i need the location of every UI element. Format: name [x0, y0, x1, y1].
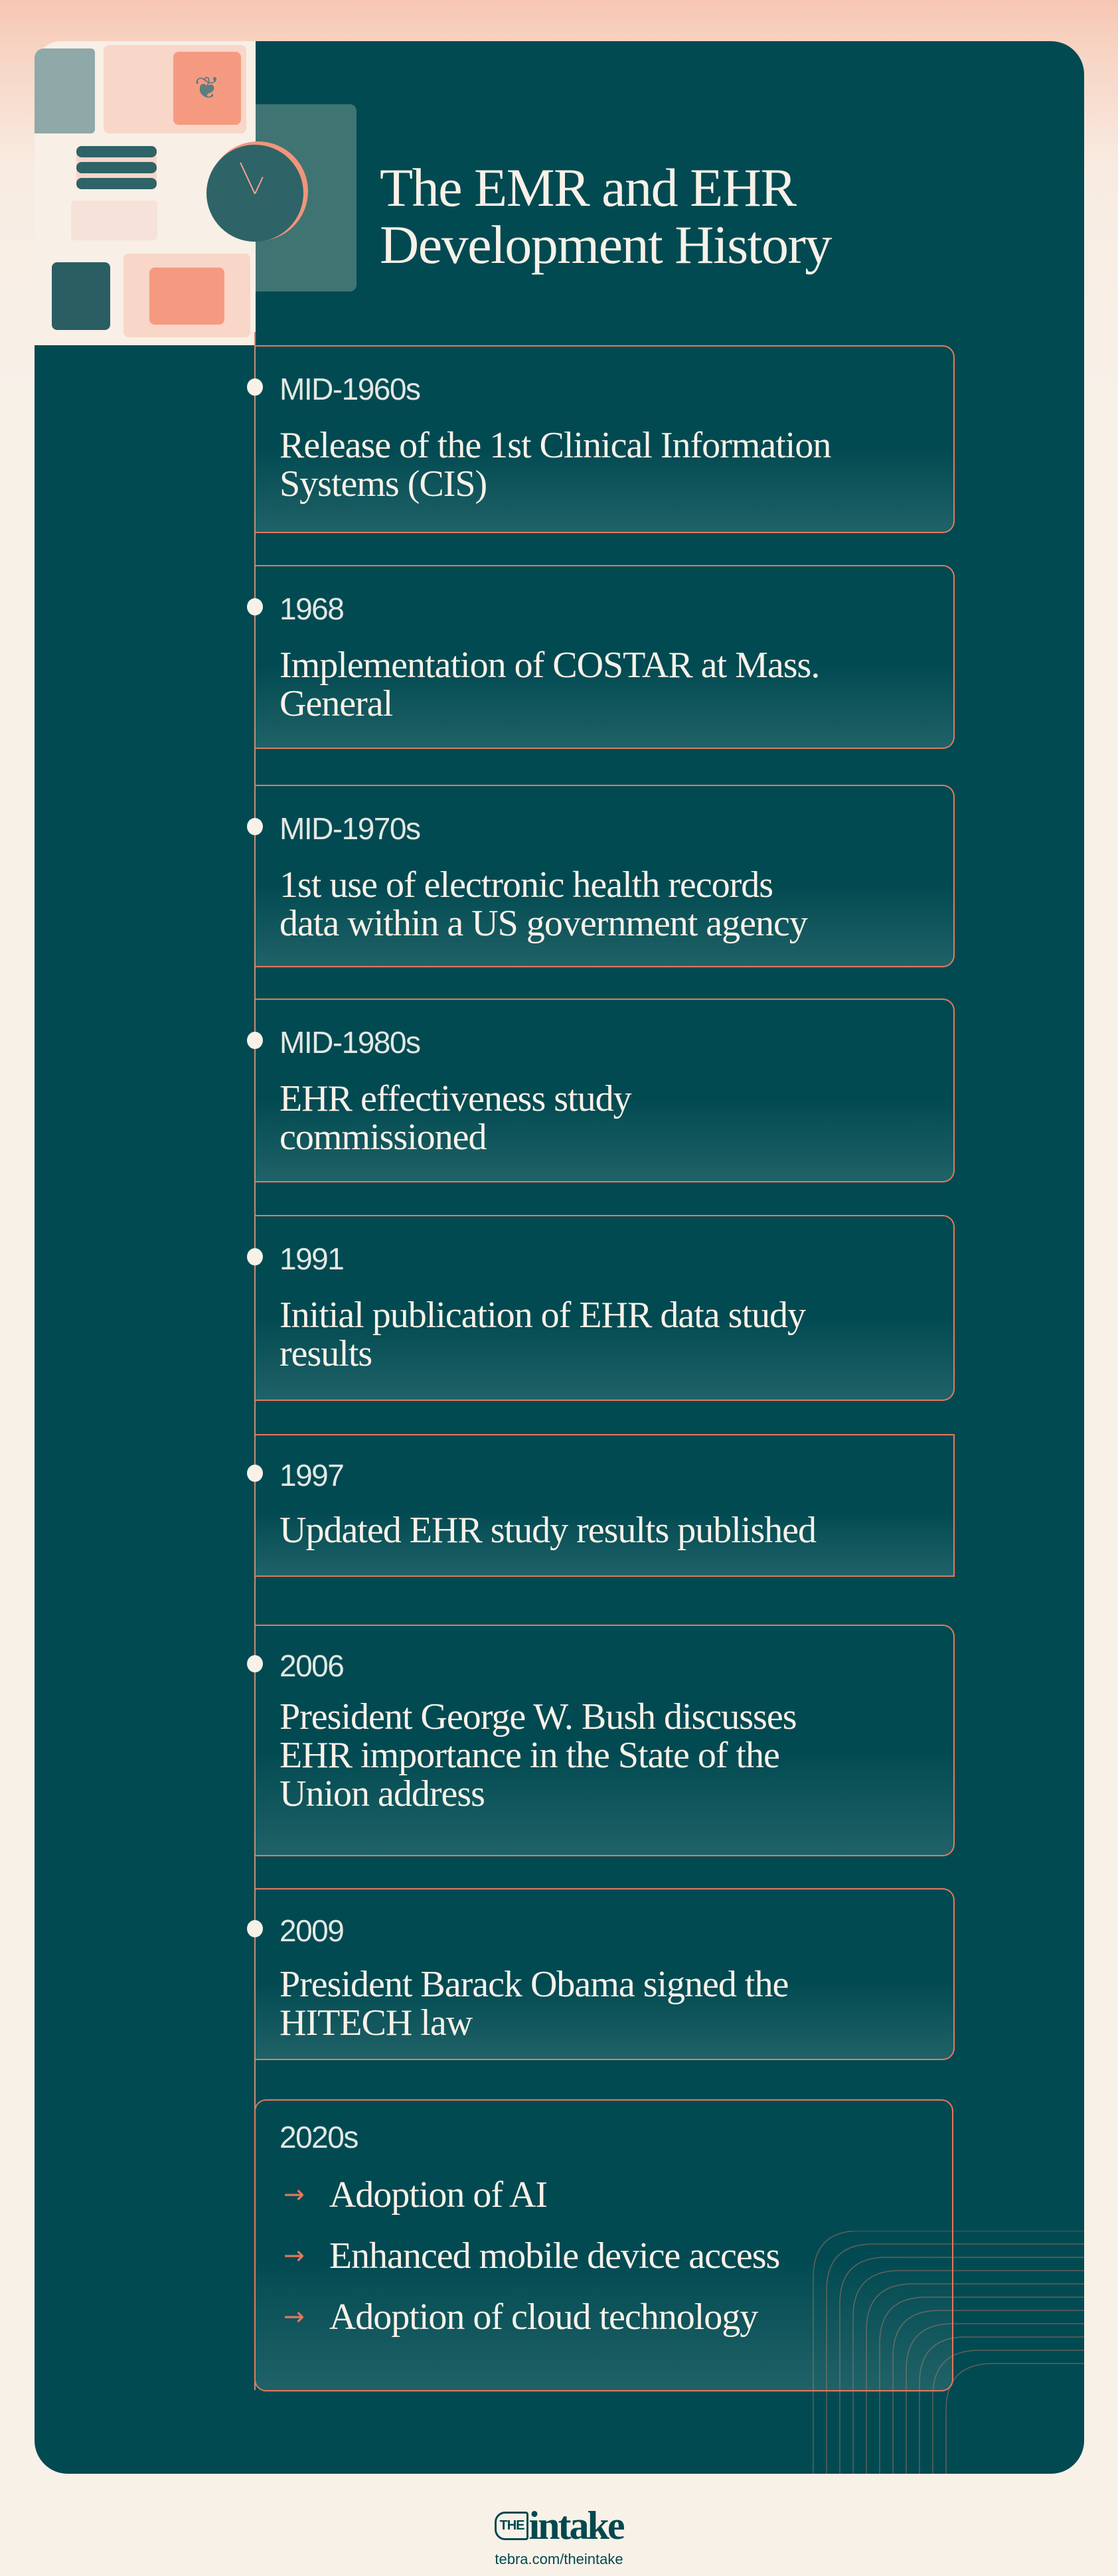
card: 1968	[256, 565, 955, 749]
card: 1991: 1991	[280, 1242, 343, 1276]
card: mid-1970s	[256, 785, 955, 967]
card: 2006: Union address	[280, 1773, 485, 1814]
card: 1997: 1997	[280, 1458, 343, 1492]
card: 2009: President Barack Obama signed the	[280, 1964, 788, 2005]
card: 1991: results	[280, 1333, 372, 1374]
bullet: mobile: → Enhanced mobile device access	[283, 2235, 779, 2277]
card: 2006: EHR importance in the State of the	[280, 1735, 779, 1776]
card: 2020s	[254, 2099, 953, 2391]
icon: lungs: ❦	[195, 71, 220, 105]
timeline line	[254, 332, 256, 2390]
card: 1991	[256, 1215, 955, 1401]
card: 1997	[256, 1434, 955, 1577]
card: 1968: Implementation of COSTAR at Mass.	[280, 645, 819, 686]
card: 2009: HITECH law	[280, 2002, 472, 2044]
illustration: header graphic	[35, 41, 357, 345]
card: mid-1970s: 1st use of electronic health records	[280, 864, 773, 906]
card: 1991: Initial publication of EHR data study	[280, 1295, 805, 1336]
card: 2006	[256, 1625, 955, 1856]
card: mid-1980s: EHR effectiveness study	[280, 1078, 631, 1119]
title: The EMR and EHR	[380, 157, 796, 218]
card: 2009: 2009	[280, 1913, 343, 1948]
card: mid-1980s: commissioned	[280, 1117, 487, 1158]
logo: the intake: THE	[499, 2518, 524, 2533]
card: 1968: 1968	[280, 592, 343, 626]
title	[380, 157, 832, 275]
card: 2009	[256, 1888, 955, 2060]
card: 1997: Updated EHR study results published	[280, 1510, 816, 1551]
decorative corner lines	[813, 2231, 1084, 2474]
card: mid-1960s	[256, 345, 955, 533]
card: 1968: General	[280, 683, 392, 724]
bullet: cloud: → Adoption of cloud technology	[283, 2296, 758, 2338]
card: mid-1960s: Systems (CIS)	[280, 463, 487, 505]
logo: the intake: intake	[528, 2504, 623, 2547]
card: 2006: President George W. Bush discusses	[280, 1696, 797, 1737]
card: 2020s: 2020s	[280, 2120, 358, 2154]
card: mid-1960s: Release of the 1st Clinical Information	[280, 425, 831, 466]
title: Development History	[380, 214, 831, 275]
icon: lungs	[173, 52, 241, 125]
card: mid-1970s: MID-1970s	[280, 811, 420, 846]
card: mid-1970s: data within a US government agency	[280, 903, 807, 944]
card: mid-1980s: MID-1980s	[280, 1025, 420, 1060]
url: tebra.com/theintake	[495, 2551, 623, 2567]
card: 2006: 2006	[280, 1649, 343, 1683]
bullet: AI: → Adoption of AI	[283, 2174, 547, 2215]
card: mid-1960s: MID-1960s	[280, 372, 420, 406]
card: mid-1980s	[256, 999, 955, 1182]
icon: clock	[208, 141, 308, 241]
